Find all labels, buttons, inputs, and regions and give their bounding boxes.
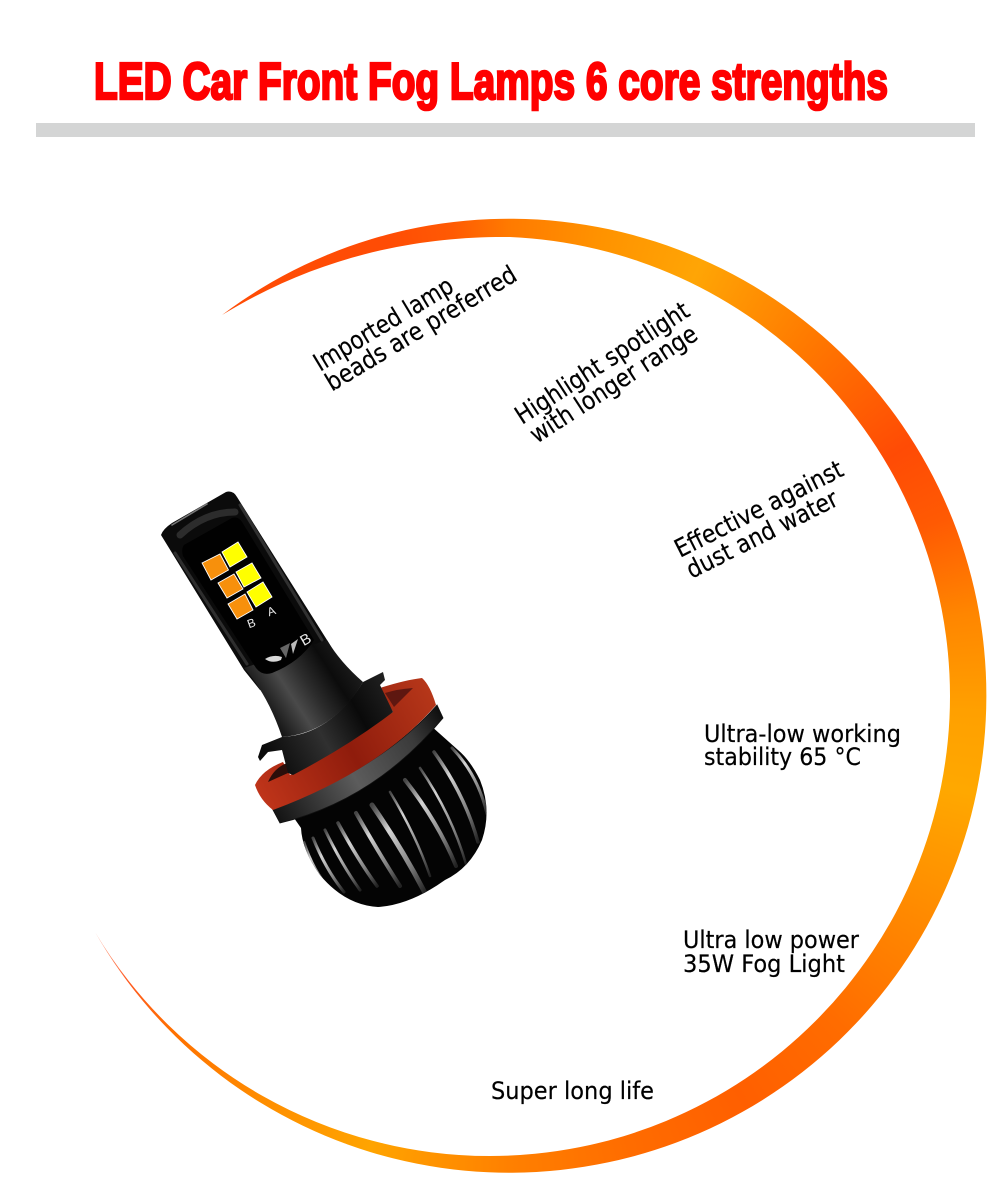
LED chips <box>202 542 272 619</box>
feature: working temperature <box>704 720 901 771</box>
lamp base flange <box>272 705 443 823</box>
feature: dust and water: Effective against <box>670 454 848 563</box>
window reflection <box>265 639 298 662</box>
feature: imported lamp beads: Imported lamp <box>308 271 459 377</box>
feature: working temperature: Ultra-low working <box>704 720 901 748</box>
feature: working temperature: stability 65 °C <box>704 743 861 771</box>
feature: highlight spotlight: Highlight spotlight <box>509 296 695 430</box>
icon: LED fog lamp bulb <box>161 492 487 907</box>
lamp heat sink ball <box>285 725 487 907</box>
lamp neck cylinder <box>244 640 363 737</box>
title divider bar <box>36 123 975 137</box>
feature: long life: Super long life <box>491 1077 654 1105</box>
LED labels: B <box>245 615 258 631</box>
lamp head body <box>161 492 345 690</box>
feature: low power: Ultra low power <box>683 926 859 954</box>
LED labels: B <box>297 630 314 650</box>
feature: low power <box>683 926 859 978</box>
feature: dust and water: dust and water <box>681 484 843 584</box>
feature: low power: 35W Fog Light <box>683 950 845 978</box>
red seal ring <box>255 678 436 810</box>
LED labels <box>245 603 314 650</box>
lamp bayonet collar <box>258 672 393 775</box>
LED window <box>182 518 314 674</box>
arc: orange crescent ring <box>96 218 986 1173</box>
feature: imported lamp beads: beads are preferred <box>320 260 522 397</box>
LED labels: A <box>265 603 278 619</box>
lamp head edge sheen <box>172 504 322 664</box>
feature: highlight spotlight: with longer range <box>524 319 703 449</box>
